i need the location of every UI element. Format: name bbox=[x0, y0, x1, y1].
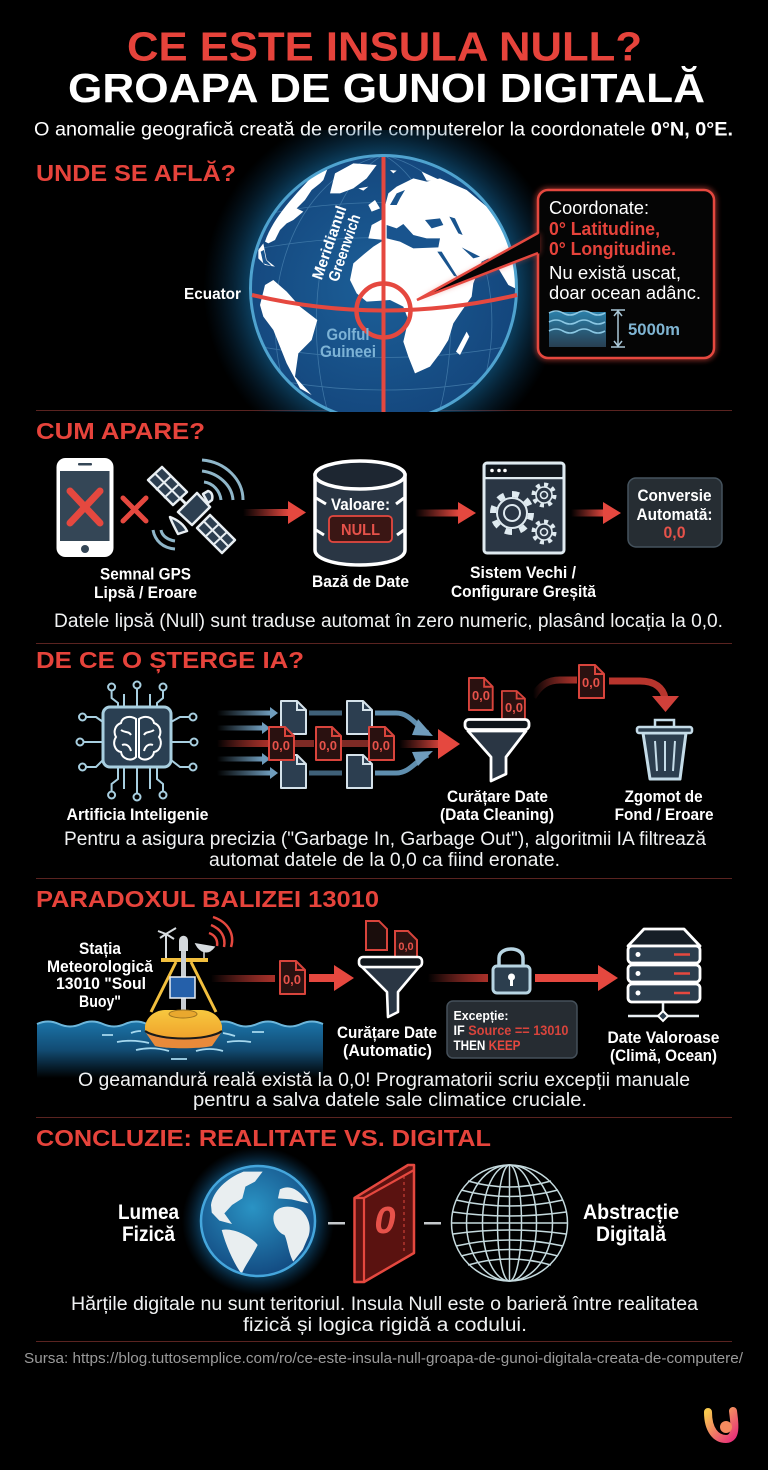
heading: de ce o sterge ia: DE CE O ȘTERGE IA? bbox=[36, 647, 304, 674]
label: gulf of guinea: Guineei bbox=[320, 342, 376, 361]
label: physical world: Fizică bbox=[122, 1223, 175, 1246]
label: gps: Semnal GPS bbox=[100, 566, 191, 584]
label: gps bbox=[94, 566, 197, 602]
arrow: system to conversion bbox=[571, 502, 621, 524]
arrow: discarded data to trash bbox=[533, 665, 679, 712]
label: weather station: Stația bbox=[79, 940, 122, 958]
arrow: lock to servers bbox=[535, 965, 618, 991]
heading: cum apare: CUM APARE? bbox=[36, 418, 205, 444]
icon: data filter funnel bbox=[465, 678, 529, 781]
icon: weather buoy bbox=[102, 917, 264, 1059]
arrow: buoy data to filter bbox=[211, 961, 354, 994]
icon: data filter funnel: 0,0 bbox=[472, 688, 490, 703]
icon: water depth bbox=[549, 310, 625, 347]
data streams bbox=[217, 701, 460, 788]
arrow: gps to database bbox=[243, 501, 306, 524]
box: automatic conversion: Conversie bbox=[638, 487, 712, 505]
documents: 0,0 bbox=[272, 738, 290, 753]
label: system: Sistem Vechi / bbox=[470, 564, 576, 582]
icon: automatic filter funnel: 0,0 bbox=[398, 941, 414, 953]
box: automatic conversion: 0,0 bbox=[664, 524, 686, 542]
arrow: buoy data to filter: 0,0 bbox=[283, 972, 301, 987]
box: exception code: Excepție: bbox=[454, 1008, 508, 1023]
subtitle: O anomalie geografică creată de erorile computerelor la coordonatele 0°N, 0°E. bbox=[34, 120, 733, 140]
label: physical world: Lumea bbox=[118, 1201, 179, 1224]
label: system bbox=[451, 564, 597, 601]
label: database: Bază de Date bbox=[312, 573, 409, 591]
icon: old system window bbox=[484, 463, 564, 553]
documents bbox=[269, 701, 394, 788]
label: meridian bbox=[309, 204, 366, 287]
label: data cleaning: Curățare Date bbox=[447, 788, 548, 806]
connector bbox=[424, 1222, 441, 1224]
label: valuable data: (Climă, Ocean) bbox=[610, 1047, 717, 1065]
box: exception code: THEN KEEP bbox=[454, 1038, 520, 1053]
label: weather station: 13010 "Soul bbox=[56, 975, 146, 993]
title: CE ESTE INSULA NULL? bbox=[127, 24, 642, 70]
icon: phone with error bbox=[56, 458, 114, 557]
text: paradox bbox=[78, 1070, 690, 1111]
globe with coordinates bbox=[210, 130, 541, 412]
label: meridian: Meridianul bbox=[309, 204, 350, 282]
icon: small x bbox=[123, 498, 146, 521]
callout: coordinates: Nu există uscat, bbox=[549, 263, 681, 283]
documents: 0,0 bbox=[319, 738, 337, 753]
documents: 0,0 bbox=[372, 738, 390, 753]
box: automatic conversion bbox=[628, 478, 722, 547]
icon: ai chip with brain bbox=[76, 682, 198, 800]
text: conclusion: fizică și logica rigidă a codului. bbox=[243, 1315, 527, 1336]
source: Sursa: https://blog.tuttosemplice.com/ro/ce-este-insula-null-groapa-de-gunoi-digitala-creata-de-computere/ bbox=[24, 1350, 744, 1367]
text: paradox: pentru a salva datele sale climatice cruciale. bbox=[193, 1090, 587, 1111]
target ring bbox=[356, 284, 410, 338]
label: data cleaning: (Data Cleaning) bbox=[440, 806, 554, 824]
title: GROAPA DE GUNOI DIGITALĂ bbox=[68, 65, 705, 111]
equator line bbox=[252, 295, 517, 310]
bar: filter to lock bbox=[428, 974, 488, 982]
label: data cleaning bbox=[440, 788, 554, 824]
label: system: Configurare Greșită bbox=[451, 583, 597, 601]
label: noise: Zgomot de bbox=[625, 788, 703, 806]
label: automatic cleaning: (Automatic) bbox=[343, 1042, 432, 1060]
box: automatic conversion: Automată: bbox=[636, 506, 712, 524]
callout: coordinates: 0° Latitudine, bbox=[549, 219, 660, 239]
label: automatic cleaning bbox=[337, 1024, 437, 1060]
label: digital abstraction bbox=[583, 1201, 679, 1246]
label: weather station: Meteorologică bbox=[47, 958, 154, 976]
label: ai: Artificia Inteligenie bbox=[66, 806, 208, 824]
arrow: database to system bbox=[415, 502, 476, 524]
icon: automatic filter funnel bbox=[359, 921, 422, 1017]
heading: conclusion: CONCLUZIE: REALITATE VS. DIGITAL bbox=[36, 1125, 491, 1151]
label: gps: Lipsă / Eroare bbox=[94, 584, 197, 602]
label: equator: Ecuator bbox=[184, 286, 241, 303]
sea bbox=[37, 1022, 323, 1078]
callout: coordinates: 5000m bbox=[628, 320, 680, 339]
callout: coordinates: Coordonate: bbox=[549, 198, 649, 218]
label: gulf of guinea: Golful bbox=[326, 325, 370, 344]
label: valuable data: Date Valoroase bbox=[608, 1029, 720, 1047]
label: gulf of guinea bbox=[320, 325, 376, 361]
label: noise bbox=[615, 788, 714, 824]
text: why ai removes: automat datele de la 0,0 ca fiind eronate. bbox=[209, 850, 560, 871]
label: noise: Fond / Eroare bbox=[615, 806, 714, 824]
label: digital abstraction: Abstracție bbox=[583, 1201, 679, 1224]
icon: database: NULL bbox=[341, 522, 380, 539]
label: meridian: Greenwich bbox=[326, 212, 364, 284]
logo bbox=[708, 1411, 734, 1439]
icon: database: Valoare: bbox=[331, 495, 390, 514]
icon: servers bbox=[628, 929, 700, 1021]
icon: satellite bbox=[148, 460, 243, 553]
text: how it appears: Datele lipsă (Null) sunt traduse automat în zero numeric, plasând locația la 0,0. bbox=[54, 611, 723, 632]
label: automatic cleaning: Curățare Date bbox=[337, 1024, 437, 1042]
icon: data filter funnel: 0,0 bbox=[505, 700, 523, 715]
box: exception code: IF Source == 13010 bbox=[454, 1023, 568, 1038]
icon: barrier panel with zero: 0 bbox=[374, 1200, 396, 1242]
icon: trash bin bbox=[637, 720, 692, 779]
label: weather station bbox=[47, 940, 154, 1011]
callout: coordinates bbox=[417, 190, 714, 358]
box: exception code bbox=[447, 1001, 577, 1058]
text: why ai removes: Pentru a asigura precizia ("Garbage In, Garbage Out"), algoritmii IA filtrează bbox=[64, 829, 706, 850]
icon: database bbox=[315, 461, 405, 565]
icon: physical globe bbox=[182, 1147, 334, 1295]
callout: coordinates: 0° Longitudine. bbox=[549, 239, 676, 259]
heading: unde se afla: UNDE SE AFLĂ? bbox=[36, 159, 236, 186]
text: why ai removes bbox=[64, 829, 706, 871]
connector bbox=[328, 1222, 345, 1224]
title bbox=[68, 24, 705, 111]
icon: lock bbox=[493, 949, 530, 993]
text: conclusion bbox=[71, 1294, 698, 1336]
icon: wireframe globe bbox=[452, 1165, 568, 1281]
arrow: discarded data to trash: 0,0 bbox=[582, 675, 600, 690]
icon: barrier panel with zero bbox=[354, 1165, 414, 1282]
text: conclusion: Hărțile digitale nu sunt teritoriul. Insula Null este o barieră între realitatea bbox=[71, 1294, 698, 1315]
label: digital abstraction: Digitală bbox=[596, 1223, 666, 1246]
label: weather station: Buoy" bbox=[79, 993, 121, 1011]
label: valuable data bbox=[608, 1029, 720, 1065]
text: paradox: O geamandură reală există la 0,0! Programatorii scriu excepții manuale bbox=[78, 1070, 690, 1091]
heading: paradox: PARADOXUL BALIZEI 13010 bbox=[36, 886, 379, 912]
callout: coordinates: doar ocean adânc. bbox=[549, 283, 701, 303]
label: physical world bbox=[118, 1201, 179, 1246]
